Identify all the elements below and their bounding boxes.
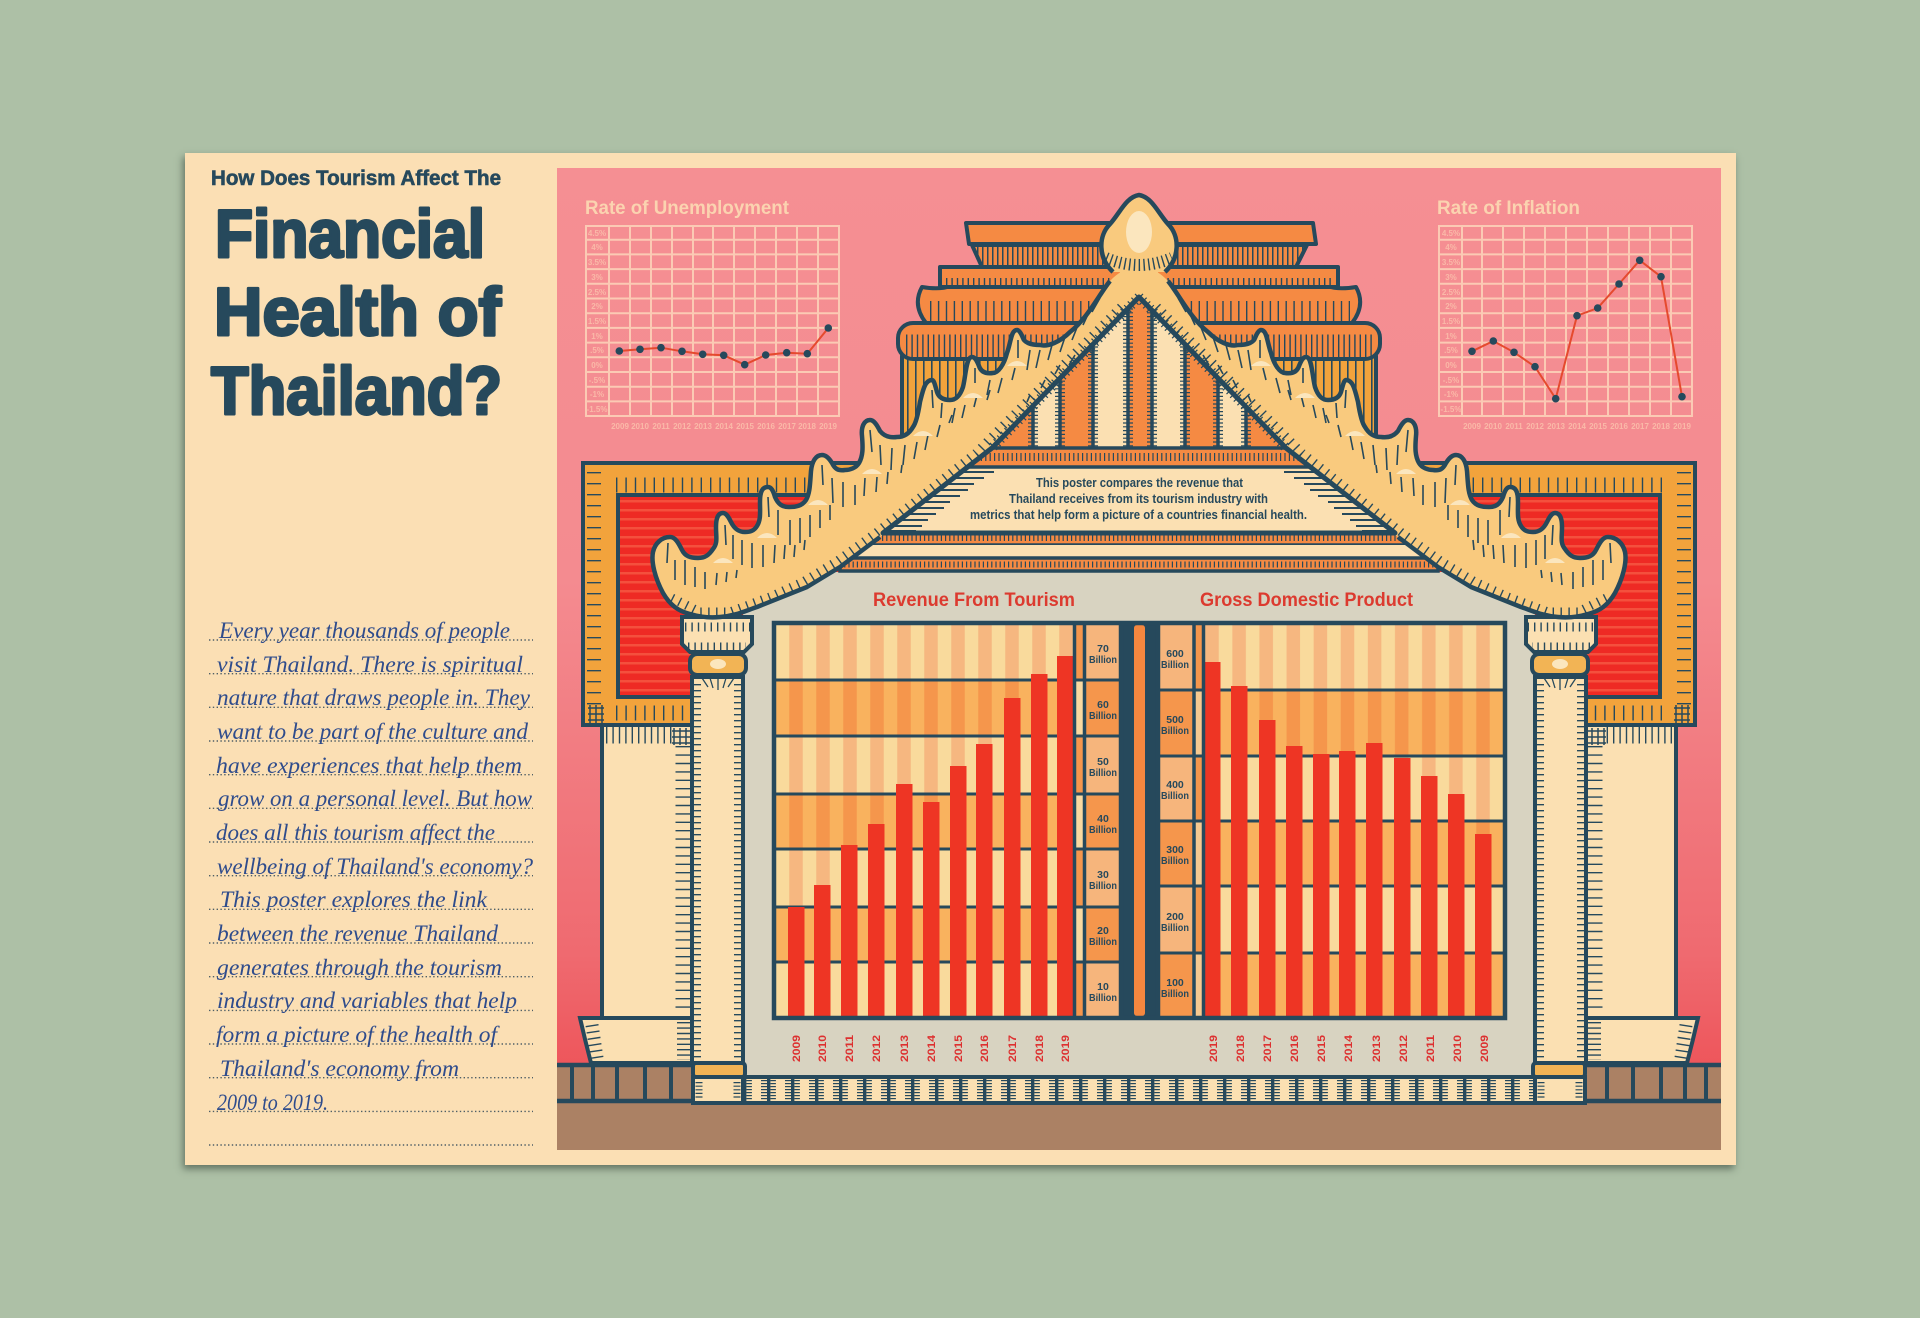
right axis scale: 100–600 billion: Billion: [1161, 922, 1189, 934]
bar chart: gross domestic product: [1203, 623, 1507, 1062]
GDP year labels: 2013: [1371, 1035, 1383, 1062]
handwritten intro text on dotted lines: wellbeing of Thailand's economy?: [217, 854, 533, 879]
GDP year labels: 2009: [1479, 1035, 1491, 1062]
tier two: [940, 267, 1338, 287]
chart: rate of inflation: 4%: [1445, 243, 1457, 252]
title: Health of: Health of: [214, 274, 501, 350]
chart: rate of unemployment: [585, 198, 839, 431]
left axis scale: 10–70 billion: Billion: [1089, 992, 1117, 1004]
chart: rate of unemployment: -1.5%: [587, 405, 607, 414]
gable description text: [970, 476, 1307, 522]
tier three: [918, 286, 1360, 323]
gable description text: Thailand receives from its tourism industry with: [1009, 492, 1268, 506]
chart: rate of inflation: 2014: [1568, 422, 1586, 431]
left rafter: [652, 262, 1139, 617]
right wing frame: [1400, 463, 1721, 1101]
chart: rate of inflation: -1%: [1444, 390, 1458, 399]
GDP year labels: 2010: [1452, 1035, 1464, 1062]
ground: [557, 1063, 1721, 1150]
chart: rate of inflation: 3.5%: [1442, 258, 1460, 267]
chart: rate of inflation: 2%: [1445, 302, 1457, 311]
chart: rate of inflation: 2017: [1631, 422, 1649, 431]
chart: rate of unemployment: 2018: [798, 422, 816, 431]
chart: rate of unemployment: 2017: [778, 422, 796, 431]
tier one plate: [966, 223, 1316, 244]
horizontal bands under gable: [840, 531, 1438, 571]
GDP year labels: 2014: [1343, 1034, 1355, 1062]
GDP year labels: 2012: [1398, 1035, 1410, 1062]
left axis scale: 10–70 billion: 70: [1097, 643, 1109, 655]
right axis scale: 100–600 billion: Billion: [1161, 659, 1189, 671]
center pillar: [1121, 623, 1158, 1018]
amber column band: [902, 356, 1376, 446]
handwritten intro text on dotted lines: generates through the tourism: [217, 955, 502, 980]
inflation heading: Rate of Inflation: [1437, 198, 1580, 219]
chart: rate of inflation: 2013: [1547, 422, 1565, 431]
chart: rate of unemployment: 2010: [631, 422, 649, 431]
handwritten intro text on dotted lines: Thailand's economy from: [220, 1056, 459, 1081]
handwritten intro text on dotted lines: Every year thousands of people: [218, 618, 510, 643]
left axis scale: 10–70 billion: 50: [1097, 756, 1109, 768]
revenue year labels: 2019: [1060, 1035, 1072, 1062]
chart: rate of unemployment: 2%: [591, 302, 603, 311]
handwritten intro text on dotted lines: nature that draws people in. They: [217, 685, 531, 710]
right axis scale: 100–600 billion: 500: [1166, 714, 1184, 726]
tier one base: [972, 245, 1307, 267]
GDP year labels: 2018: [1235, 1035, 1247, 1062]
right axis scale: 100–600 billion: Billion: [1161, 790, 1189, 802]
left axis scale: 10–70 billion: Billion: [1089, 654, 1117, 666]
chart: rate of inflation: 0%: [1445, 361, 1457, 370]
handwritten intro text on dotted lines: visit Thailand. There is spiritual: [217, 652, 523, 677]
chart: rate of inflation: 2019: [1673, 422, 1691, 431]
left axis scale: 10–70 billion: Billion: [1089, 824, 1117, 836]
handwritten intro text on dotted lines: grow on a personal level. But how: [218, 786, 533, 811]
unemployment heading: Rate of Unemployment: [585, 198, 790, 219]
handwritten intro text on dotted lines: want to be part of the culture and: [217, 719, 528, 744]
chart: rate of unemployment: 0%: [591, 361, 603, 370]
chart: rate of unemployment: 3.5%: [588, 258, 606, 267]
chart: rate of unemployment: 3%: [591, 273, 603, 282]
chart: rate of inflation: 2018: [1652, 422, 1670, 431]
chart: rate of unemployment: 2009: [611, 422, 629, 431]
left axis scale: 10–70 billion: Billion: [1089, 880, 1117, 892]
left axis scale: 10–70 billion: [1074, 623, 1121, 1018]
revenue year labels: 2009: [791, 1035, 803, 1062]
temple upper roof tiers: [898, 223, 1380, 446]
handwritten intro text on dotted lines: between the revenue Thailand: [217, 921, 498, 946]
GDP year labels: 2015: [1316, 1035, 1328, 1062]
chart: rate of unemployment: 2016: [757, 422, 775, 431]
handwritten intro text on dotted lines: [209, 618, 533, 1145]
GDP year labels: 2011: [1425, 1035, 1437, 1062]
left axis scale: 10–70 billion: 40: [1097, 813, 1109, 825]
right axis scale: 100–600 billion: Billion: [1161, 725, 1189, 737]
chart: rate of unemployment: 1%: [591, 332, 603, 341]
chart: rate of unemployment: -1%: [590, 390, 604, 399]
chart: rate of inflation: -.5%: [1443, 376, 1459, 385]
gable description text: This poster compares the revenue that: [1036, 476, 1244, 490]
right axis scale: 100–600 billion: 400: [1166, 779, 1184, 791]
handwritten intro text on dotted lines: This poster explores the link: [220, 887, 488, 912]
handwritten intro text on dotted lines: 2009 to 2019.: [217, 1090, 328, 1115]
chart: rate of inflation: [1437, 198, 1692, 431]
chart: rate of unemployment: 2014: [715, 422, 733, 431]
chart: rate of unemployment: 2013: [694, 422, 712, 431]
chart: rate of inflation: 1.5%: [1442, 317, 1460, 326]
left axis scale: 10–70 billion: 30: [1097, 869, 1109, 881]
right axis scale: 100–600 billion: Billion: [1161, 855, 1189, 867]
revenue year labels: [791, 1034, 1072, 1062]
bar chart: revenue from tourism: [774, 623, 1076, 1062]
left axis scale: 10–70 billion: 10: [1097, 981, 1109, 993]
chart: rate of unemployment: .5%: [590, 346, 604, 355]
right axis scale: 100–600 billion: 100: [1166, 977, 1184, 989]
left axis scale: 10–70 billion: 20: [1097, 925, 1109, 937]
GDP year labels: [1208, 1034, 1491, 1062]
chart: rate of inflation: 2012: [1526, 422, 1544, 431]
chart: rate of unemployment: 2.5%: [588, 288, 606, 297]
left axis scale: 10–70 billion: Billion: [1089, 936, 1117, 948]
revenue year labels: 2017: [1007, 1035, 1019, 1062]
right axis scale: 100–600 billion: 300: [1166, 844, 1184, 856]
chart heading: revenue: Revenue From Tourism: [873, 590, 1075, 611]
revenue year labels: 2013: [899, 1035, 911, 1062]
chart: rate of inflation: -1.5%: [1441, 405, 1461, 414]
right column: [1526, 617, 1596, 1103]
left axis scale: 10–70 billion: Billion: [1089, 710, 1117, 722]
right rafter: [1139, 262, 1626, 617]
revenue year labels: 2016: [979, 1035, 991, 1062]
chart: rate of inflation: .5%: [1444, 346, 1458, 355]
chart: rate of inflation: 4.5%: [1442, 229, 1460, 238]
gable triangle with stripes: [883, 297, 1395, 533]
GDP year labels: 2017: [1262, 1035, 1274, 1062]
title block: [211, 167, 502, 429]
chart: rate of unemployment: 2011: [652, 422, 670, 431]
revenue year labels: 2014: [926, 1034, 938, 1062]
grey central wall: [743, 572, 1535, 1077]
left column: [682, 617, 752, 1103]
handwritten intro text on dotted lines: have experiences that help them: [216, 753, 522, 778]
tier four: [898, 323, 1380, 359]
chart: rate of inflation: 3%: [1445, 273, 1457, 282]
revenue year labels: 2015: [953, 1035, 965, 1062]
chart: rate of unemployment: 4.5%: [588, 229, 606, 238]
pink illustration panel: [557, 168, 1721, 1150]
footer frieze: [743, 1077, 1535, 1103]
chart: rate of inflation: 2015: [1589, 422, 1607, 431]
chart: rate of unemployment: 4%: [591, 243, 603, 252]
chart: rate of unemployment: -.5%: [589, 376, 605, 385]
chart: rate of unemployment: 1.5%: [588, 317, 606, 326]
right axis scale: 100–600 billion: 200: [1166, 911, 1184, 923]
right axis scale: 100–600 billion: [1158, 623, 1204, 1018]
chart: rate of inflation: 2009: [1463, 422, 1481, 431]
chart: rate of inflation: 1%: [1445, 332, 1457, 341]
chart: rate of unemployment: 2012: [673, 422, 691, 431]
revenue year labels: 2012: [871, 1035, 883, 1062]
roof finial: [1101, 195, 1177, 290]
left wing frame: [557, 463, 878, 1101]
handwritten intro text on dotted lines: does all this tourism affect the: [216, 820, 495, 845]
chart: rate of inflation: 2016: [1610, 422, 1628, 431]
left axis scale: 10–70 billion: Billion: [1089, 767, 1117, 779]
handwritten intro text on dotted lines: industry and variables that help: [217, 988, 517, 1013]
chart heading: GDP: Gross Domestic Product: [1200, 590, 1414, 611]
chart: rate of inflation: 2010: [1484, 422, 1502, 431]
poster paper: [185, 153, 1736, 1165]
chart: rate of inflation: 2011: [1505, 422, 1523, 431]
revenue year labels: 2010: [817, 1035, 829, 1062]
chart: rate of unemployment: 2019: [819, 422, 837, 431]
revenue year labels: 2011: [844, 1035, 856, 1062]
title: Financial: Financial: [215, 196, 485, 272]
right axis scale: 100–600 billion: Billion: [1161, 988, 1189, 1000]
title: kicker: How Does Tourism Affect The: [211, 167, 501, 190]
handwritten intro text on dotted lines: form a picture of the health of: [216, 1022, 501, 1047]
title: Thailand?: Thailand?: [211, 353, 502, 429]
gable description text: metrics that help form a picture of a countries financial health.: [970, 508, 1307, 522]
chart: rate of unemployment: 2015: [736, 422, 754, 431]
revenue year labels: 2018: [1034, 1035, 1046, 1062]
GDP year labels: 2016: [1289, 1035, 1301, 1062]
right axis scale: 100–600 billion: 600: [1166, 648, 1184, 660]
GDP year labels: 2019: [1208, 1035, 1220, 1062]
left axis scale: 10–70 billion: 60: [1097, 699, 1109, 711]
chart frame: [774, 623, 1505, 1018]
chart: rate of inflation: 2.5%: [1442, 288, 1460, 297]
